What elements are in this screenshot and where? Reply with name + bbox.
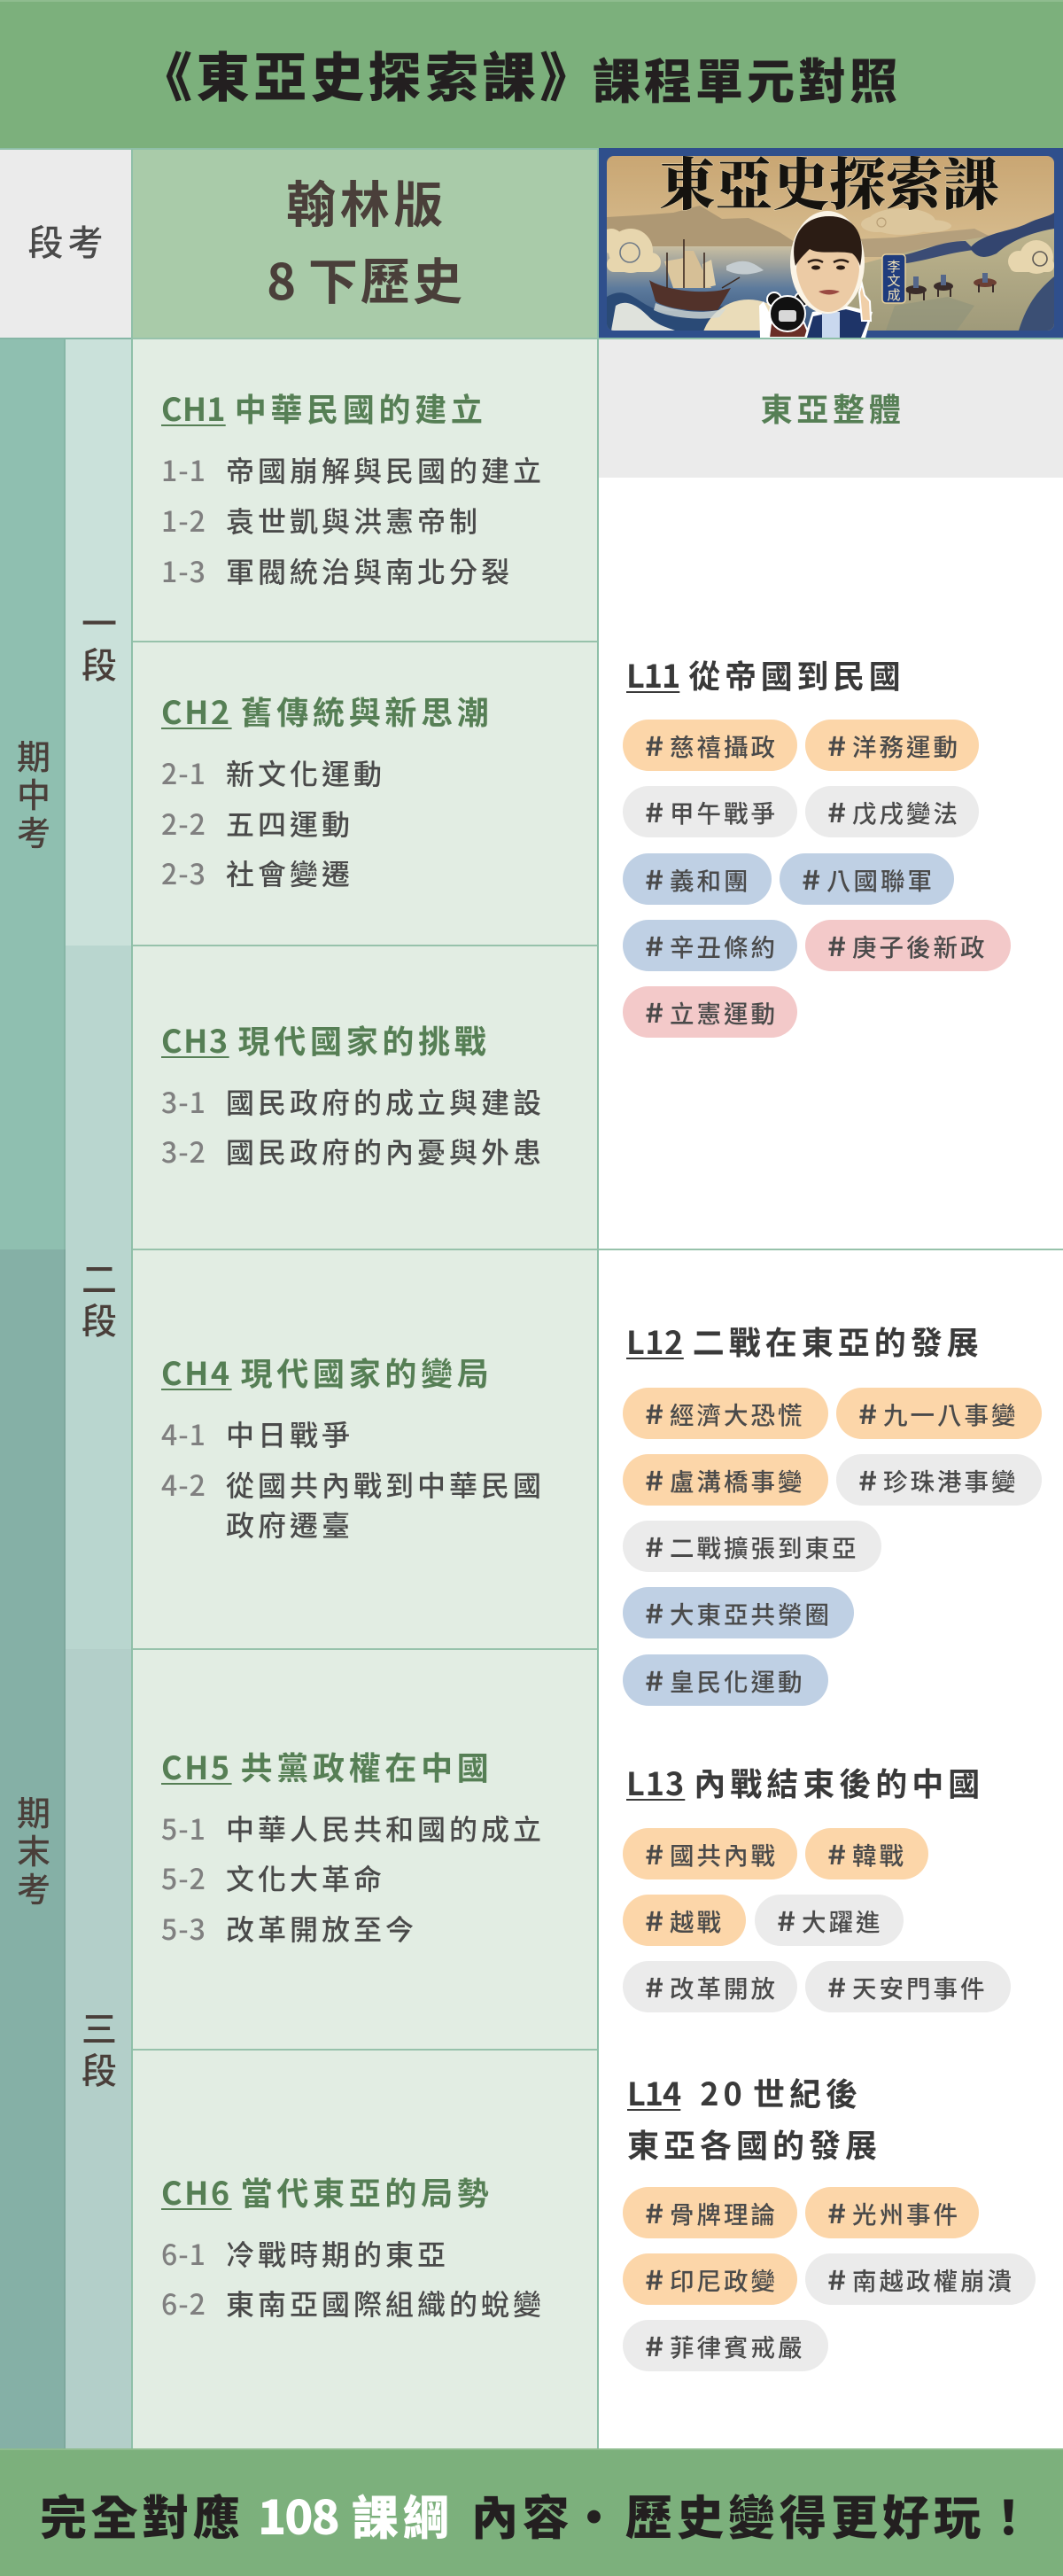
tag [623, 853, 772, 905]
column header: exam: 段考 [28, 214, 108, 266]
tag: 皇民化運動 [670, 1662, 804, 1698]
item 6-2: 東南亞國際組織的蛻變 [226, 2283, 545, 2323]
tag: # [645, 791, 663, 830]
item 2-1: 新文化運動 [226, 752, 385, 793]
item 2-2 [161, 803, 353, 844]
tag [623, 720, 797, 771]
tag [805, 786, 979, 837]
lesson L13 [623, 1759, 1011, 2012]
tag: 國共內戰 [670, 1836, 778, 1872]
third exam segment [66, 1649, 131, 2448]
item 6-2: 6-2 [161, 2283, 206, 2323]
tag [623, 920, 797, 971]
item 4-1: 4-1 [161, 1413, 206, 1454]
tag [623, 2253, 797, 2305]
tag: # [827, 925, 846, 964]
tag: 八國聯軍 [826, 861, 935, 897]
lesson title L12: L12 二戰在東亞的發展 [626, 1318, 983, 1364]
tag [805, 2187, 979, 2238]
grade and subject: 8 下歷史 [267, 243, 465, 314]
item 2-3: 社會變遷 [226, 852, 353, 893]
title: comparison subtitle: 課程單元對照 [593, 43, 901, 113]
tag: # [645, 1833, 663, 1872]
teacher name tag [882, 254, 905, 304]
tag: # [827, 2192, 846, 2231]
tag: # [645, 1393, 663, 1432]
tag: 越戰 [670, 1903, 724, 1938]
tag [623, 986, 797, 1038]
panel: East Asia overview heading [599, 338, 1063, 478]
segment three label: 三段 [81, 2001, 117, 2094]
slogan text: 課綱 [352, 2481, 454, 2549]
item 3-2: 國民政府的內憂與外患 [226, 1131, 545, 1171]
tag [805, 1961, 1011, 2012]
tag: # [645, 2259, 663, 2298]
tag: 甲午戰爭 [670, 794, 778, 829]
slogan text [40, 2481, 1036, 2549]
tag: # [858, 1393, 877, 1432]
item 3-2: 3-2 [161, 1131, 206, 1171]
panel: CH4 [133, 1250, 597, 1650]
tag: 二戰擴張到東亞 [670, 1529, 859, 1564]
panel: CH6 [133, 2051, 597, 2448]
teacher name tag: 成 [887, 285, 901, 304]
item 4-2: 4-2 [161, 1464, 206, 1505]
panel: CH2 [133, 642, 597, 946]
lesson title L14: 東亞各國的發展 [627, 2121, 881, 2167]
heading CH3: CH3 現代國家的挑戰 [161, 1016, 491, 1062]
tag [805, 720, 979, 771]
item 3-1: 3-1 [161, 1081, 206, 1122]
heading CH4: CH4 現代國家的變局 [161, 1349, 493, 1395]
tag: 天安門事件 [852, 1969, 987, 2004]
tag: # [858, 1459, 877, 1498]
tag: 大躍進 [802, 1903, 882, 1938]
item 5-1: 中華人民共和國的成立 [226, 1808, 545, 1848]
tag: 盧溝橋事變 [670, 1462, 804, 1498]
tag [623, 786, 797, 837]
tag: 洋務運動 [852, 728, 960, 763]
tag: 慈禧攝政 [670, 728, 778, 763]
item 1-2: 袁世凱與洪憲帝制 [226, 500, 481, 541]
item 4-1: 中日戰爭 [226, 1413, 353, 1454]
item 5-2: 文化大革命 [226, 1857, 385, 1898]
tag [836, 1388, 1042, 1439]
item 4-2: 政府遷臺 [226, 1504, 353, 1545]
item 2-3: 2-3 [161, 852, 206, 893]
tag [623, 1654, 828, 1706]
tag [623, 1521, 881, 1572]
midterm label: 期中考 [17, 730, 50, 855]
tag [623, 1895, 746, 1946]
slogan text: 完全對應 [40, 2481, 244, 2549]
tag: # [645, 1660, 663, 1699]
clouds [607, 229, 1054, 331]
tag: # [645, 1900, 663, 1939]
lesson title L11: L11 從帝國到民國 [626, 651, 905, 697]
item 2-2: 五四運動 [226, 803, 353, 844]
tag: 辛丑條約 [670, 928, 778, 963]
heading CH1: CH1 中華民國的建立 [161, 385, 487, 431]
teacher name tag: 文 [887, 271, 901, 290]
tag: # [645, 725, 663, 764]
tag [623, 2187, 797, 2238]
tag: 大東亞共榮圈 [670, 1595, 832, 1630]
item 4-2: 從國共內戰到中華民國 [226, 1464, 545, 1505]
cavalry [905, 273, 997, 300]
course banner illustration [599, 148, 1063, 338]
tag: 立憲運動 [670, 994, 778, 1030]
slogan text: 歷史變得更好玩！ [625, 2481, 1036, 2549]
tag [623, 1388, 828, 1439]
publisher name: 翰林版 [286, 165, 447, 237]
panel: East Asia overview heading: 東亞整體 [761, 385, 904, 431]
slogan text: 108 [258, 2481, 338, 2549]
tag: # [645, 925, 663, 964]
segment one label: 一段 [81, 595, 117, 689]
ship [649, 239, 740, 319]
tag: # [645, 992, 663, 1031]
item 4-1 [161, 1413, 353, 1454]
tag: 珍珠港事變 [883, 1462, 1019, 1498]
tag [805, 1828, 928, 1879]
tag: 經濟大恐慌 [670, 1396, 804, 1431]
tag: # [645, 1592, 663, 1631]
tag: # [645, 1526, 663, 1565]
tag: 韓戰 [852, 1836, 906, 1872]
item 6-1: 冷戰時期的東亞 [226, 2233, 449, 2274]
lesson L12 [623, 1318, 1042, 1706]
lesson L14 [623, 2069, 1036, 2371]
tag: # [645, 1966, 663, 2005]
item 2-1: 2-1 [161, 752, 206, 793]
tag [836, 1454, 1042, 1506]
panel: CH3 [133, 946, 597, 1250]
item 1-3: 軍閥統治與南北分裂 [226, 550, 513, 591]
tag [623, 2320, 828, 2371]
tag: # [827, 725, 846, 764]
final exam column [0, 1249, 66, 2448]
item 5-3: 5-3 [161, 1908, 206, 1949]
midterm column [0, 338, 66, 1249]
column header: exam [0, 148, 131, 338]
final exam label: 期末考 [17, 1786, 50, 1911]
item 3-1: 國民政府的成立與建設 [226, 1081, 545, 1122]
tag: # [827, 2259, 846, 2298]
tag: # [645, 859, 663, 898]
tag [755, 1895, 904, 1946]
lesson title L13: L13 內戰結束後的中國 [626, 1759, 984, 1805]
tag: 庚子後新政 [852, 928, 987, 963]
tag: 義和團 [670, 861, 751, 897]
lesson title L14 [627, 2069, 881, 2167]
panel: CH5 [133, 1650, 597, 2051]
tag: 九一八事變 [883, 1396, 1019, 1431]
footer slogan [0, 2448, 1063, 2576]
heading CH2: CH2 舊傳統與新思潮 [161, 688, 493, 734]
tag: # [827, 1966, 846, 2005]
tag: # [802, 859, 820, 898]
tag [623, 1828, 797, 1879]
slogan text: ・ [570, 2481, 622, 2549]
tag [780, 853, 954, 905]
lesson L11 [623, 651, 1011, 1038]
title: course name: 《東亞史探索課》 [139, 35, 597, 113]
panel: CH1 [133, 338, 597, 642]
slogan text: 內容 [471, 2481, 573, 2549]
tag: 光州事件 [852, 2195, 960, 2230]
tag: # [827, 791, 846, 830]
tag [623, 1587, 854, 1638]
item 1-1: 帝國崩解與民國的建立 [226, 449, 545, 490]
first exam segment [66, 338, 131, 946]
heading CH5: CH5 共黨政權在中國 [161, 1743, 493, 1789]
tag: 印尼政變 [670, 2261, 778, 2297]
heading CH6: CH6 當代東亞的局勢 [161, 2168, 493, 2214]
tag: 骨牌理論 [670, 2195, 778, 2230]
item 1-2: 1-2 [161, 500, 206, 541]
tag: 菲律賓戒嚴 [670, 2328, 804, 2363]
tag: 戊戌變法 [852, 794, 960, 829]
item 2-2: 2-2 [161, 803, 206, 844]
tag [805, 2253, 1036, 2305]
item 1-3: 1-3 [161, 550, 206, 591]
second exam segment [66, 946, 131, 1649]
tag: # [827, 1833, 846, 1872]
item 5-2: 5-2 [161, 1857, 206, 1898]
item 2-3 [161, 852, 353, 893]
tag: # [645, 1459, 663, 1498]
item 5-1: 5-1 [161, 1808, 206, 1848]
tag: # [777, 1900, 795, 1939]
lesson title L14: L14 20 世紀後 [627, 2069, 862, 2115]
tag: # [645, 2325, 663, 2364]
tag: 改革開放 [670, 1969, 778, 2004]
teacher portrait [790, 211, 873, 338]
title banner [0, 0, 1063, 148]
tag [623, 1454, 828, 1506]
tag: 南越政權崩潰 [852, 2261, 1014, 2297]
segment two label: 二段 [81, 1251, 117, 1344]
tag [805, 920, 1011, 971]
item 6-1: 6-1 [161, 2233, 206, 2274]
item 5-3: 改革開放至今 [226, 1908, 417, 1949]
bear mascot [759, 292, 811, 338]
item 4-2 [161, 1464, 545, 1545]
tag [623, 1961, 797, 2012]
tag: # [645, 2192, 663, 2231]
item 1-1: 1-1 [161, 449, 206, 490]
column header: Hanlin textbook [133, 148, 597, 338]
teacher name tag: 李 [887, 257, 901, 276]
